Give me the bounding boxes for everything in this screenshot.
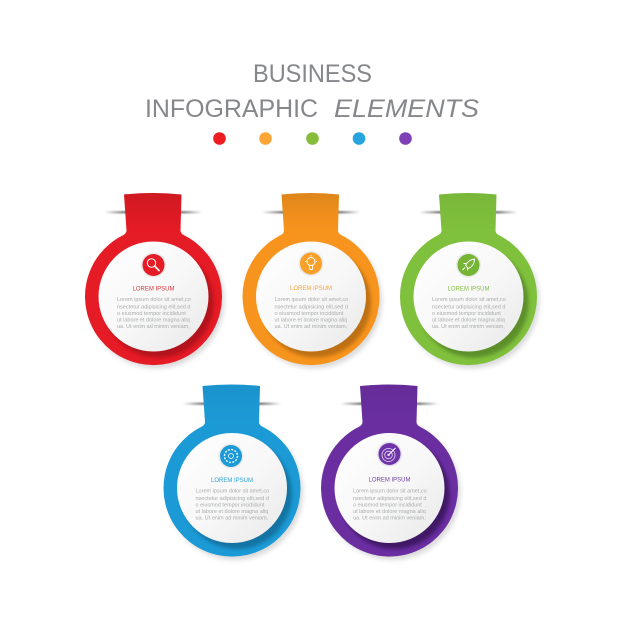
- body text: ut labore et dolore magna aliq: [274, 318, 347, 324]
- body text: Lorem ipsum dolor sit amet,co: [432, 297, 506, 303]
- body text: o eiusmod tempor incididunt: [432, 311, 501, 317]
- heading: LOREM IPSUM: [368, 478, 411, 484]
- body text: ua. Ut enim ad minim veniam,: [274, 324, 348, 330]
- body text: ut labore et dolore magna aliq: [432, 318, 505, 324]
- body text: Lorem ipsum dolor sit amet,co: [353, 488, 427, 494]
- badge: purple: [321, 384, 460, 560]
- icon: target: [377, 442, 402, 466]
- icon: gear: [218, 444, 244, 468]
- body text: o eiusmod tempor incididunt: [274, 311, 344, 317]
- body text: nsectetur adipisicing elit,sed d: [274, 304, 348, 310]
- body text: Lorem ipsum dolor sit amet,co: [274, 297, 348, 303]
- title: INFOGRAPHIC: [145, 95, 318, 123]
- body text: Lorem ipsum dolor sit amet,co: [196, 488, 269, 494]
- body text: ua. Ut enim ad minim veniam,: [196, 516, 269, 522]
- heading: LOREM IPSUM: [290, 286, 332, 292]
- badge: blue: [164, 384, 303, 560]
- body text: Lorem ipsum dolor sit amet,co: [117, 297, 191, 303]
- title: BUSINESS: [253, 60, 372, 88]
- body text: nsectetur adipisicing elit,sed d: [196, 496, 269, 502]
- body text: [274, 297, 348, 330]
- heading: LOREM IPSUM: [447, 286, 490, 292]
- body text: ua. Ut enim ad minim veniam,: [432, 324, 505, 330]
- body text: nsectetur adipisicing elit,sed d: [353, 496, 426, 502]
- body text: [353, 488, 427, 522]
- badge: orange: [242, 193, 382, 368]
- body text: ut labore et dolore magna aliq: [117, 318, 190, 324]
- icon: rocket: [456, 252, 481, 278]
- icon: magnifier: [141, 252, 166, 278]
- colour dots: [213, 132, 412, 145]
- title: [145, 60, 479, 123]
- body text: o eiusmod tempor incididunt: [353, 502, 422, 508]
- body text: [117, 297, 191, 330]
- body text: o eiusmod tempor incididunt: [117, 311, 186, 317]
- title: ELEMENTS: [334, 95, 479, 123]
- body text: [196, 488, 269, 522]
- body text: ut labore et dolore magna aliq: [196, 509, 268, 515]
- body text: [432, 297, 506, 330]
- body text: ua. Ut enim ad minim veniam,: [117, 324, 190, 330]
- body text: ua. Ut enim ad minim veniam,: [353, 516, 426, 522]
- heading: LOREM IPSUM: [211, 478, 253, 484]
- body text: nsectetur adipisicing elit,sed d: [117, 304, 190, 310]
- heading: LOREM IPSUM: [132, 286, 175, 292]
- badge: green: [400, 193, 540, 368]
- body text: o eiusmod tempor incididunt: [196, 502, 265, 508]
- icon: light bulb: [298, 251, 324, 276]
- badge: red: [85, 193, 224, 368]
- body text: ut labore et dolore magna aliq: [353, 509, 426, 515]
- body text: nsectetur adipisicing elit,sed d: [432, 304, 505, 310]
